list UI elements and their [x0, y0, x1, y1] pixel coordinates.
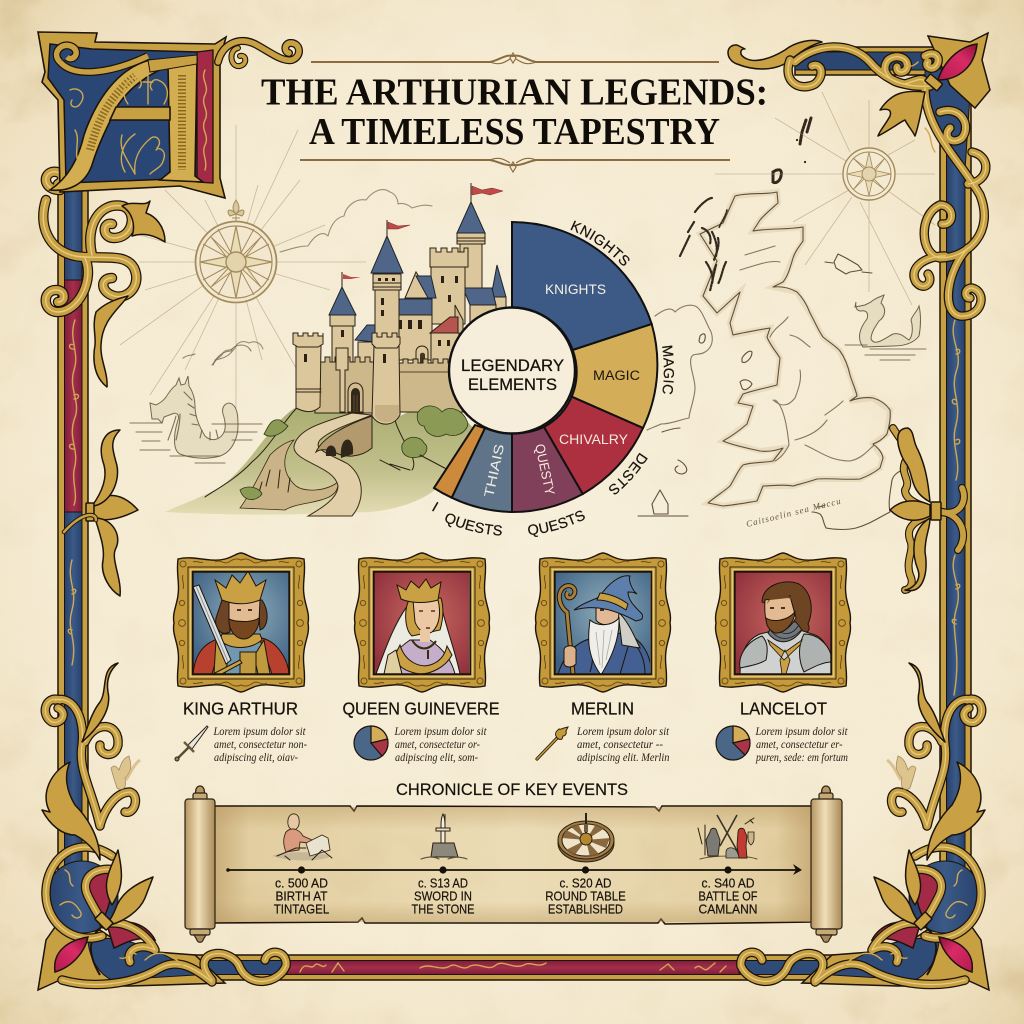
second compass rose	[715, 92, 935, 305]
portrait: Lancelot	[716, 553, 850, 692]
segment: orange	[434, 425, 485, 498]
scottish islands	[680, 118, 811, 291]
flourish lower left	[64, 430, 138, 596]
outer curved labels: MAGIC	[662, 346, 674, 394]
map label: Caitsoelin sea Maccu	[745, 496, 842, 529]
second cone tower	[332, 323, 353, 373]
Castle on a hill	[165, 183, 506, 516]
event labels: SWORD IN	[414, 890, 472, 904]
illuminated initial A	[38, 32, 299, 198]
segment: magic	[572, 324, 657, 428]
right border band	[940, 90, 971, 880]
outer curved labels: KNIGHTS	[570, 220, 630, 266]
icon: sword	[175, 726, 208, 761]
inner gold filigree	[70, 72, 167, 164]
left tower	[296, 345, 321, 412]
bio: King Arthur: amet, consectetur non-	[214, 737, 307, 751]
front tower	[372, 346, 400, 424]
portrait: Merlin	[536, 553, 670, 692]
segment: questy	[512, 427, 583, 512]
bio: Lancelot: puren, sede: em fortum	[755, 750, 848, 764]
outer curved labels: I	[429, 500, 440, 515]
left border band	[58, 190, 88, 880]
right roller	[811, 786, 842, 942]
bio: Queen Guinevere: amet, consectetur or-	[395, 737, 480, 751]
initial outer panel	[38, 32, 226, 198]
corner bottom left	[38, 663, 286, 990]
name: Queen Guinevere: QUEEN GUINEVERE	[342, 698, 500, 718]
dragon left	[130, 345, 262, 463]
icon: pie chart lancelot	[716, 726, 750, 760]
bio: Lancelot	[755, 724, 848, 764]
clouds around castle	[212, 190, 432, 365]
bio: Merlin: adipiscing elit. Merlin	[577, 750, 670, 764]
event labels: c. S13 AD	[418, 876, 468, 890]
event labels	[274, 876, 758, 916]
flourish lower right	[890, 428, 964, 591]
event labels: ESTABLISHED	[548, 902, 623, 916]
portrait: Queen Guinevere	[355, 553, 489, 692]
event labels: c. S40 AD	[702, 876, 754, 890]
bio: King Arthur: adipiscing elit, oiav-	[214, 750, 298, 764]
wall right	[398, 359, 466, 412]
bio: Merlin	[576, 724, 670, 764]
bio: Merlin: Lorem ipsum dolor sit	[576, 724, 670, 738]
chronicle heading: CHRONICLE OF KEY EVENTS	[396, 780, 628, 799]
centre label: ELEMENTS	[468, 376, 557, 394]
icon: staff	[537, 727, 568, 759]
outer curved labels: DESTS	[609, 452, 648, 494]
bottom border band	[100, 955, 926, 980]
segment labels	[481, 282, 640, 499]
centre circle	[449, 308, 575, 434]
title: A TIMELESS TAPESTRY	[309, 111, 720, 153]
segment: thiais	[452, 428, 512, 512]
shrubs	[240, 406, 468, 500]
icon: pie chart guinevere	[354, 726, 388, 760]
bio: King Arthur	[213, 724, 307, 764]
event labels: CAMLANN	[698, 902, 758, 916]
hill	[165, 405, 475, 515]
title rule top	[311, 53, 719, 64]
centre label: LEGENDARY	[461, 357, 564, 375]
segment labels: CHIVALRY	[559, 432, 628, 447]
top right scroll of initial	[218, 41, 299, 62]
map of Britain	[638, 92, 935, 530]
back towers and buildings	[491, 265, 506, 297]
segment: knights	[512, 222, 652, 350]
name: Merlin: MERLIN	[571, 698, 634, 718]
event icon: sword in the stone	[421, 814, 467, 859]
corner bottom right	[741, 663, 989, 990]
Legendary elements donut chart	[429, 220, 674, 537]
outer curved labels	[429, 220, 674, 537]
event icon: round table	[558, 813, 614, 862]
bio: Queen Guinevere: adipiscing elit, som-	[395, 750, 478, 764]
outer curved labels: QUESTS	[445, 514, 502, 536]
bio: Queen Guinevere	[394, 724, 487, 764]
flourish upper left	[43, 172, 165, 387]
name: Lancelot: LANCELOT	[740, 698, 827, 718]
compass rose left	[120, 125, 366, 408]
gold letter A	[50, 60, 170, 190]
title	[261, 72, 768, 153]
segment labels: THIAIS	[481, 443, 507, 499]
segment labels: KNIGHTS	[545, 282, 606, 297]
title rule bottom	[300, 158, 730, 172]
event labels: ROUND TABLE	[545, 890, 626, 904]
bio: Lancelot: amet, consectetur er-	[756, 737, 843, 751]
event labels: BIRTH AT	[276, 890, 328, 904]
event labels: TINTAGEL	[274, 902, 329, 916]
cliff under road	[240, 440, 338, 510]
left curtain wall and gatehouse	[315, 357, 375, 413]
segment: chivalry	[544, 397, 643, 494]
event icon: battle of Camlann	[698, 815, 757, 859]
parchment sheet	[214, 806, 812, 924]
bio: King Arthur: Lorem ipsum dolor sit	[213, 724, 306, 738]
top right corner	[728, 33, 990, 316]
outer curved labels: QUESTS	[528, 510, 585, 537]
segment labels: MAGIC	[593, 368, 640, 383]
segment labels: QUESTY	[532, 443, 558, 496]
timeline scroll	[185, 786, 842, 942]
road and bridge	[294, 413, 372, 516]
event labels: c. S20 AD	[560, 876, 612, 890]
event labels: THE STONE	[412, 902, 474, 916]
name: King Arthur: KING ARTHUR	[183, 698, 298, 718]
event labels: BATTLE OF	[698, 890, 758, 904]
timeline arrow	[226, 864, 802, 875]
left roller	[185, 786, 215, 942]
bio: Lancelot: Lorem ipsum dolor sit	[755, 724, 848, 738]
title: THE ARTHURIAN LEGENDS:	[261, 72, 768, 114]
event labels: c. 500 AD	[275, 876, 328, 890]
portrait: King Arthur	[174, 553, 308, 692]
sea dragon right	[845, 295, 926, 360]
event icon: birth at Tintagel	[272, 814, 332, 860]
bio: Merlin: amet, consectetur --	[577, 737, 663, 751]
tall cone tower	[375, 288, 399, 338]
bio: Queen Guinevere: Lorem ipsum dolor sit	[394, 724, 487, 738]
centre label	[461, 357, 564, 394]
